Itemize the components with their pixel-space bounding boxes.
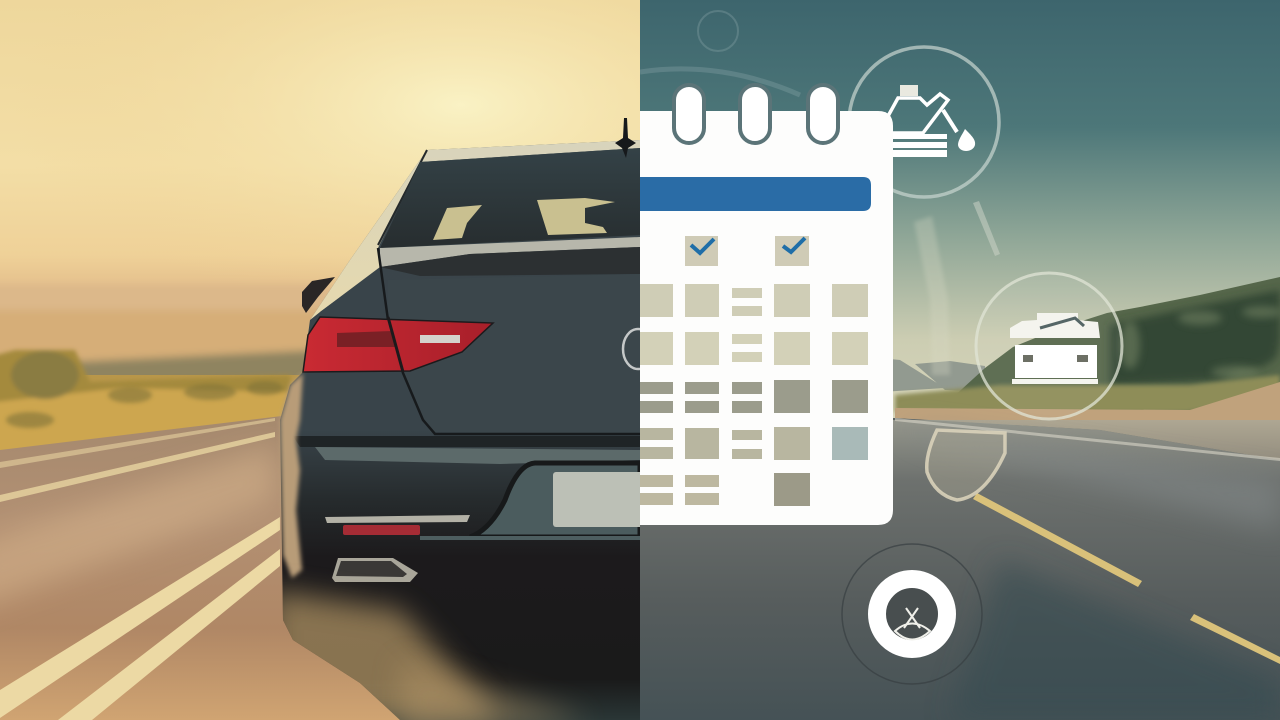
bumper top highlight (315, 447, 640, 464)
road (640, 418, 1280, 720)
trunk seam (378, 248, 640, 434)
calendar header bar (640, 177, 871, 211)
gauge inner (885, 587, 939, 641)
faint decorative arcs (640, 11, 800, 95)
oil can spout (943, 110, 957, 132)
roadside bushes (0, 350, 300, 460)
calendar sheet (640, 111, 893, 525)
oil can body (887, 94, 948, 133)
tail light inner (337, 331, 395, 347)
tail light (303, 317, 493, 372)
oil can cap (900, 85, 918, 96)
C pillar highlight (310, 140, 640, 320)
quarter panel (320, 299, 338, 312)
battery lid (1010, 313, 1100, 338)
dust cloud (270, 590, 590, 720)
battery case (1015, 345, 1097, 378)
side mirror (302, 277, 335, 313)
icon: oil can in circle (849, 47, 999, 197)
calendar rings (674, 85, 838, 143)
checked boxes (685, 236, 809, 266)
icon: brake disc lens (927, 430, 1005, 500)
fender highlight (280, 373, 303, 578)
lower body band (293, 436, 640, 447)
logo (622, 328, 640, 370)
green hillside (950, 277, 1280, 412)
sky (0, 0, 640, 300)
spoiler shadow (380, 247, 640, 276)
pillar seam line (378, 150, 427, 245)
rear window (380, 148, 640, 248)
trim badge (420, 335, 460, 343)
exhaust (332, 558, 418, 582)
licence plate recess (470, 463, 640, 537)
antenna (615, 118, 636, 158)
battery terminals (1023, 355, 1088, 362)
lower chrome strip (325, 515, 470, 523)
calendar (640, 85, 893, 525)
far hills (893, 359, 985, 392)
gauge ring (877, 579, 947, 649)
battery base (1012, 379, 1098, 384)
car body (280, 140, 640, 720)
oil stack (893, 134, 947, 157)
forest shading (1110, 290, 1280, 385)
car rear, left half (270, 118, 653, 720)
decorative light streaks (914, 201, 1000, 375)
road motion blur (1076, 467, 1280, 526)
right panel: road scene with maintenance icons (640, 0, 1280, 720)
roadside ground (895, 382, 1280, 460)
chrome strip (380, 237, 640, 267)
road edge line (895, 418, 1280, 461)
distant fields (0, 288, 324, 375)
left panel: sunny road scene (0, 0, 640, 720)
oil drop (958, 129, 975, 151)
road centre line (973, 493, 1280, 664)
forest highlights (1120, 306, 1280, 378)
icon: tire gauge circle (842, 544, 982, 684)
road shading lower right (964, 564, 1274, 712)
reflector (343, 525, 420, 535)
road (0, 416, 400, 720)
window reflections (433, 198, 615, 240)
road glare (0, 445, 275, 610)
sky (640, 0, 1280, 425)
road lane lines (0, 418, 280, 720)
tail light seam (388, 317, 403, 372)
trunk panel (388, 274, 640, 434)
icon: car battery in circle (976, 273, 1122, 419)
roadside scrub (895, 375, 1280, 412)
gauge glyph (895, 608, 930, 640)
lid detail (1040, 318, 1084, 328)
licence plate (553, 472, 643, 527)
teal lower bumper line (420, 536, 640, 540)
schedule grid (640, 284, 868, 506)
